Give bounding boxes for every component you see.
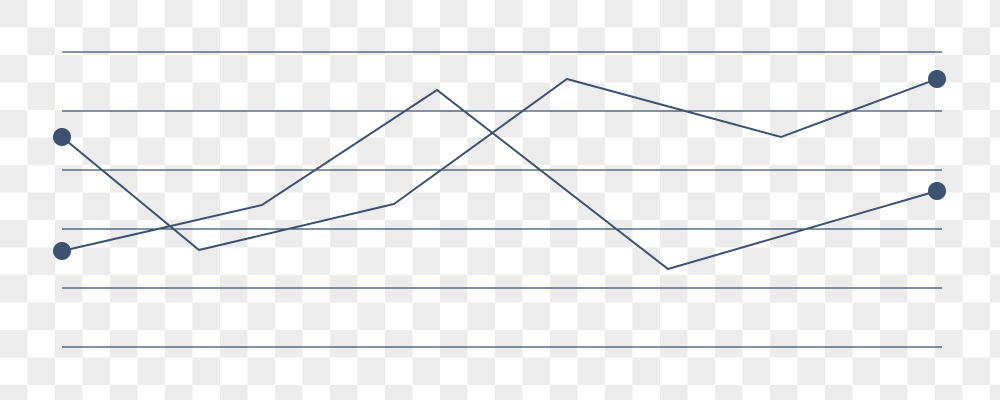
series 2 line: [53, 70, 946, 250]
grid lines: [62, 52, 942, 347]
series 1 line: [53, 90, 946, 269]
